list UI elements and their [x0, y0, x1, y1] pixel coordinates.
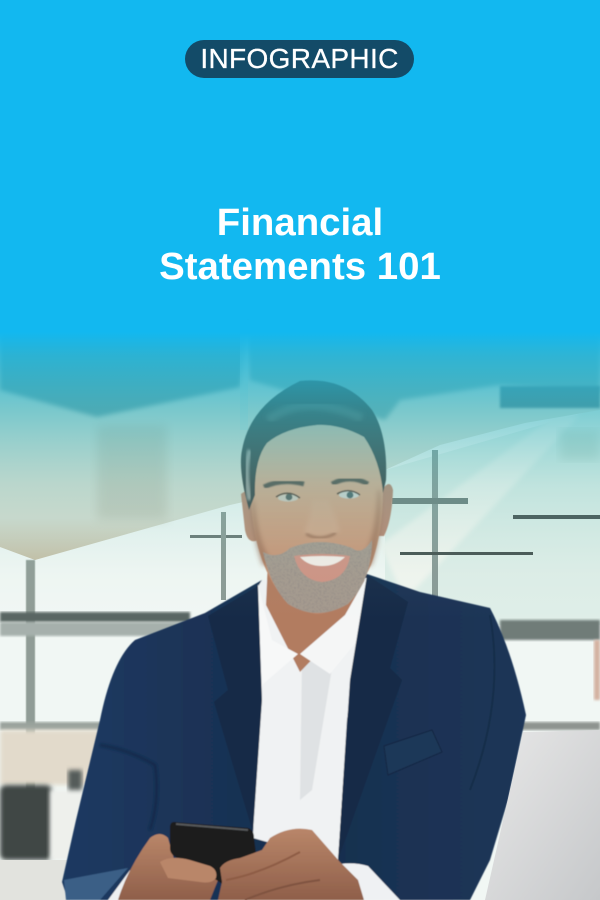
sleeve cuff	[64, 868, 128, 900]
eyes	[278, 494, 298, 502]
thumb	[160, 858, 216, 882]
sleeve fold	[100, 745, 157, 830]
title: Financial	[217, 201, 383, 244]
shirt	[253, 578, 367, 862]
left hand	[118, 834, 218, 900]
window frames	[432, 450, 438, 600]
right window glass	[385, 408, 600, 625]
nose	[304, 500, 340, 538]
face	[251, 420, 383, 614]
jacket	[62, 574, 526, 900]
lapels	[208, 586, 262, 832]
ears	[241, 491, 258, 541]
title: Statements 101	[159, 245, 441, 288]
eyebrows	[264, 482, 304, 487]
pocket flap	[384, 730, 442, 775]
title	[159, 201, 441, 288]
phone	[170, 822, 256, 888]
beard	[263, 540, 372, 613]
blue gradient overlay	[0, 320, 600, 620]
collar	[255, 584, 298, 685]
ceiling	[0, 325, 600, 560]
face shading	[252, 490, 381, 570]
man	[62, 380, 526, 900]
badge: INFOGRAPHIC: INFOGRAPHIC	[200, 43, 399, 74]
neck	[266, 550, 365, 672]
laptop	[485, 730, 600, 900]
right hand	[218, 829, 364, 900]
mouth	[294, 554, 350, 582]
lower-left blurred interior	[0, 730, 105, 785]
office background	[0, 325, 600, 900]
hair	[241, 380, 386, 510]
